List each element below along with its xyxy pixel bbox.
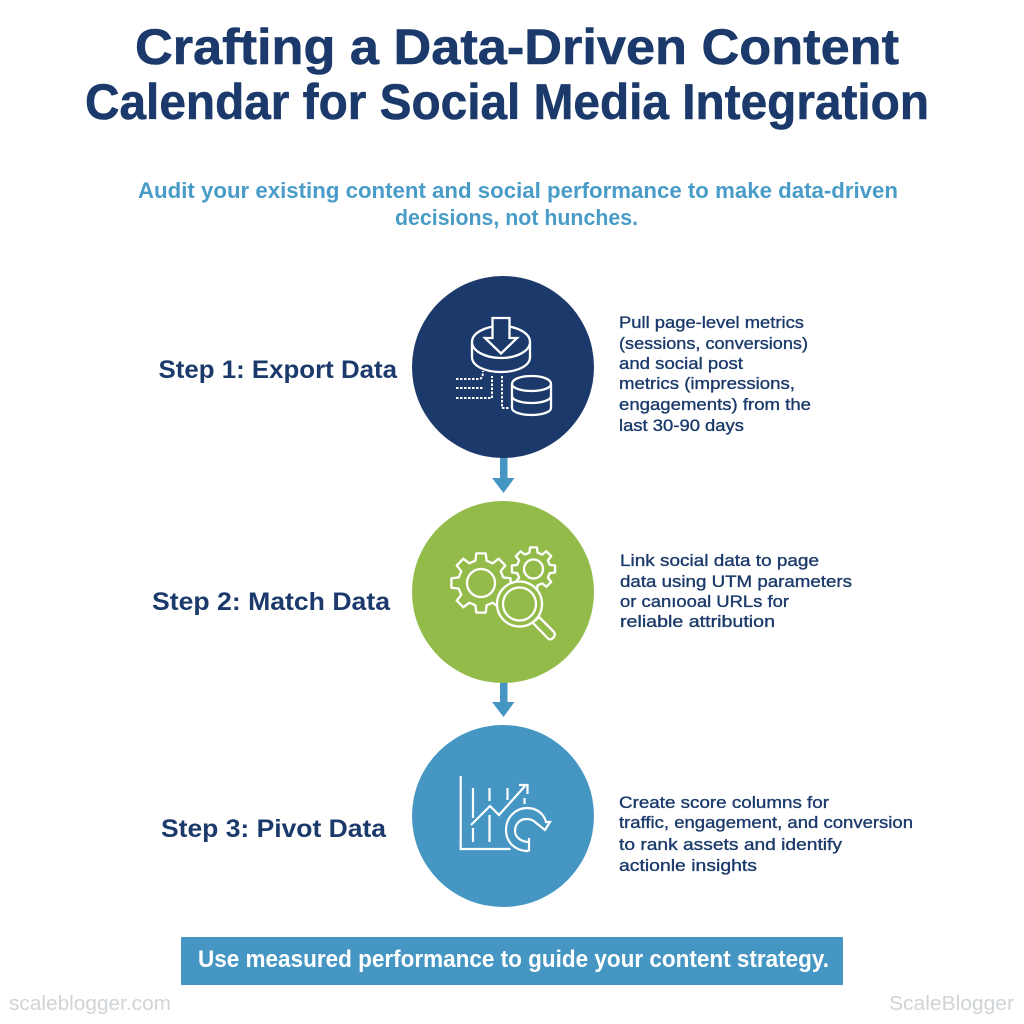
step 3 description: traffic, engagement, and conversion xyxy=(619,813,913,832)
title xyxy=(85,19,929,130)
arrow: step 2 to step 3 xyxy=(492,680,514,717)
step 2 description: reliable attribution xyxy=(620,612,775,631)
step 1 description: (sessions, conversions) xyxy=(619,334,808,353)
step 3 label: Step 3: Pivot Data xyxy=(161,815,387,843)
title: Crafting a Data-Driven Content xyxy=(135,19,899,75)
step 3 xyxy=(161,725,913,907)
step 3 description: to rank assets and identify xyxy=(619,835,843,854)
step 1 description: and social post xyxy=(619,354,743,373)
footer left watermark: scaleblogger.com xyxy=(9,993,171,1015)
callout banner xyxy=(181,937,843,985)
step 1 description: last 30-90 days xyxy=(619,416,744,435)
step 1 description: engagements) from the xyxy=(619,395,811,414)
step 3 description xyxy=(619,793,913,875)
step 3 description: Create score columns for xyxy=(619,793,829,812)
step 2 description: data using UTM parameters xyxy=(620,572,852,591)
step 2 description: Link social data to page xyxy=(620,551,819,570)
subtitle xyxy=(138,178,898,230)
step 1 description xyxy=(619,313,811,435)
subtitle: Audit your existing content and social performance to make data-driven xyxy=(138,178,898,203)
step 2 xyxy=(152,501,852,683)
step 3 description: actionle insights xyxy=(619,856,757,875)
step 1 description: Pull page-level metrics xyxy=(619,313,804,332)
arrow: step 1 to step 2 xyxy=(492,456,514,493)
step 1 xyxy=(158,276,811,458)
step 2 description xyxy=(620,551,852,631)
footer right watermark: ScaleBlogger xyxy=(889,993,1014,1015)
subtitle: decisions, not hunches. xyxy=(395,205,638,230)
step 1 label: Step 1: Export Data xyxy=(158,356,398,384)
step 2 label: Step 2: Match Data xyxy=(152,588,391,616)
icon: gears and magnifier xyxy=(451,547,555,639)
callout banner: Use measured performance to guide your content strategy. xyxy=(198,946,829,973)
step 2 circle xyxy=(412,501,594,683)
title: Calendar for Social Media Integration xyxy=(85,74,929,130)
step 1 circle xyxy=(412,276,594,458)
step 2 description: or canıooal URLs for xyxy=(620,592,789,611)
step 3 circle xyxy=(412,725,594,907)
icon: export data xyxy=(456,318,551,415)
icon: chart and cycle xyxy=(461,776,550,852)
step 1 description: metrics (impressions, xyxy=(619,374,795,393)
